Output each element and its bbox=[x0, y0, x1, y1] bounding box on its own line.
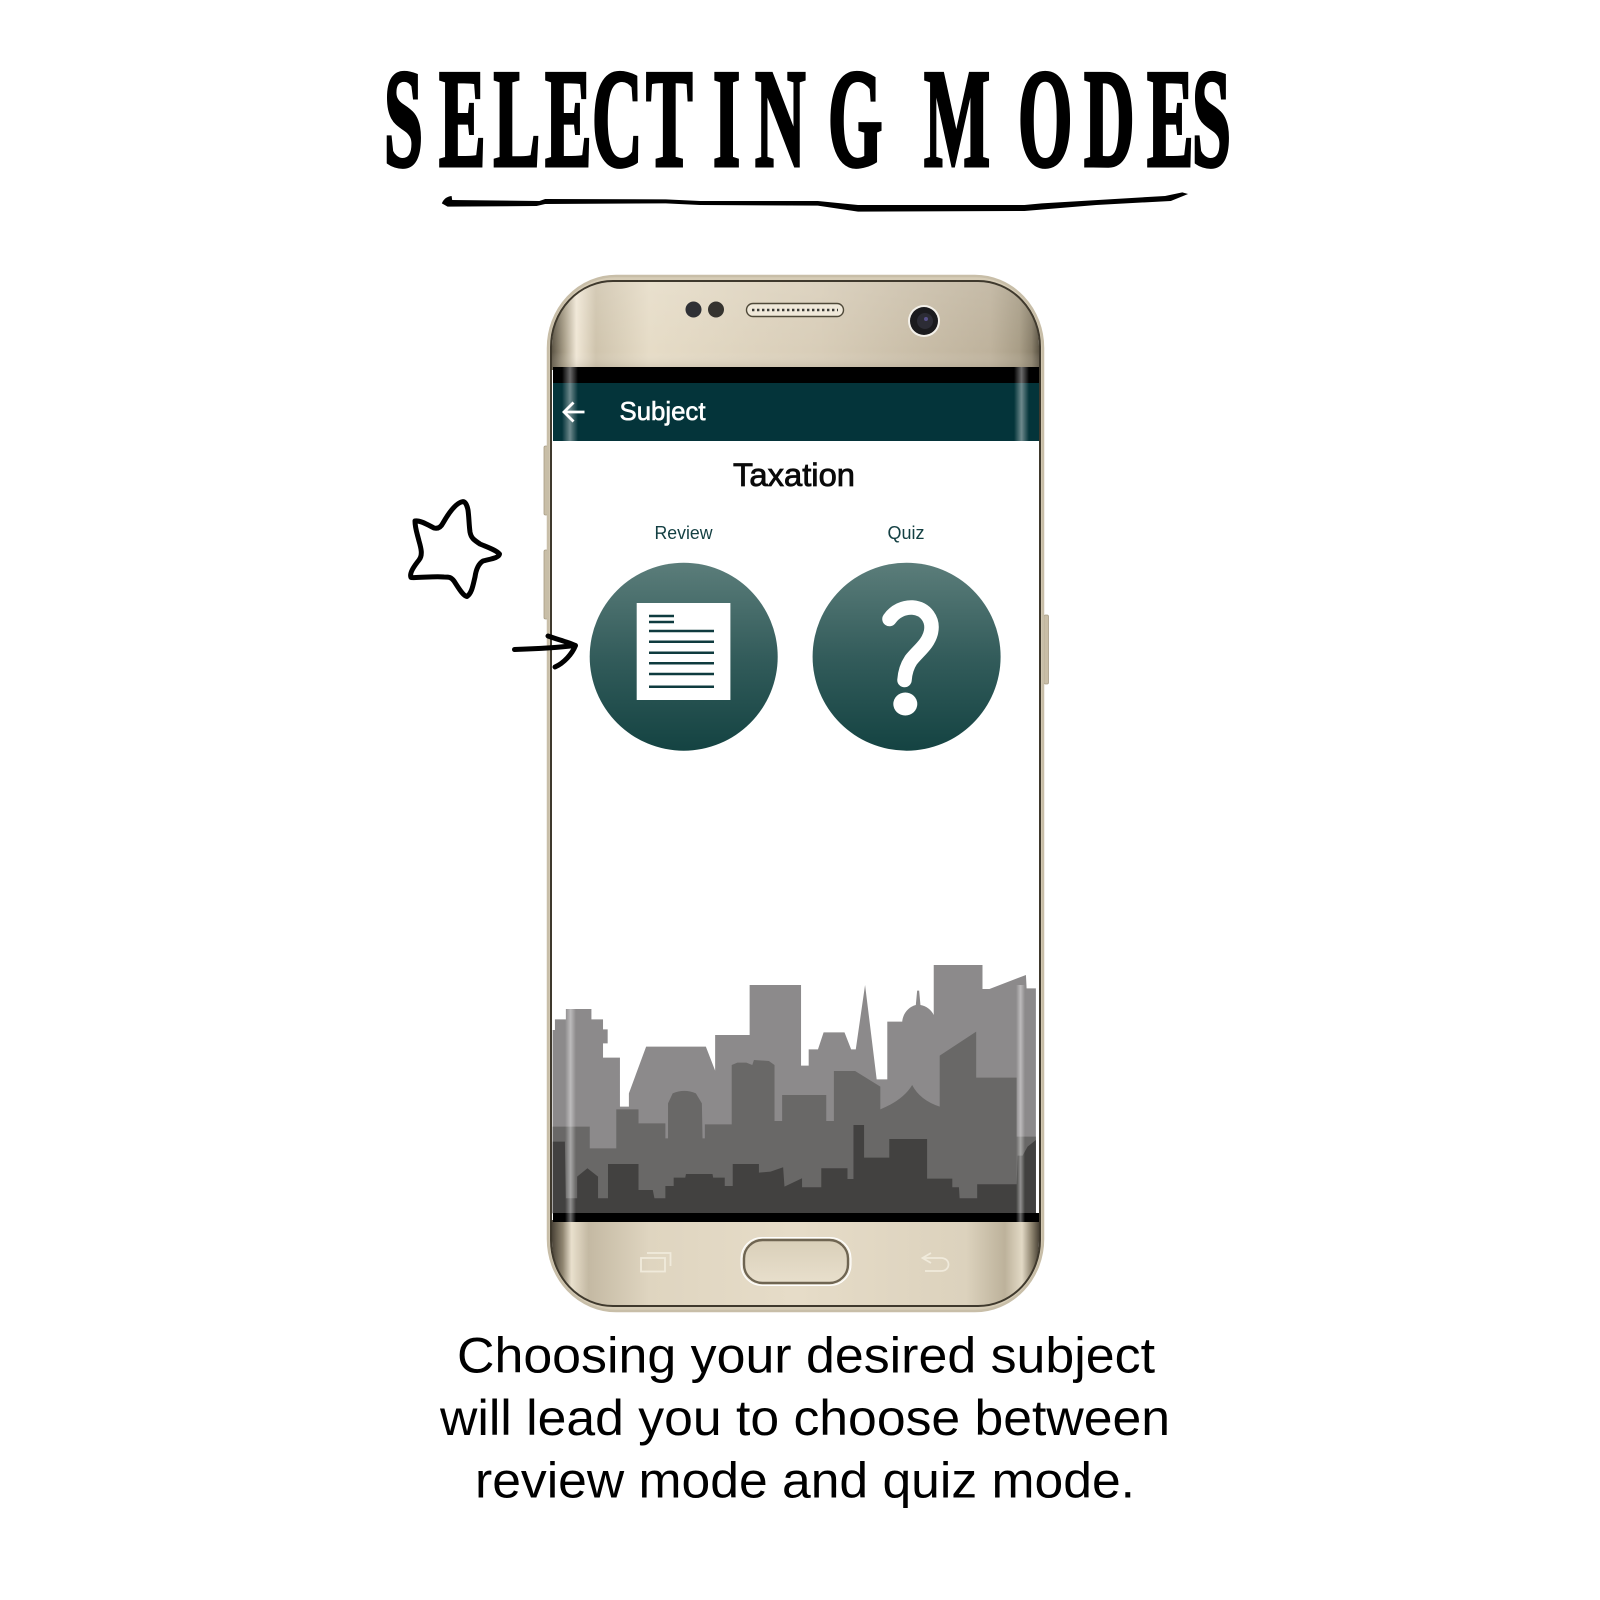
subject heading: Taxation bbox=[733, 457, 855, 493]
review label: Review bbox=[654, 522, 713, 543]
front camera bbox=[908, 305, 940, 337]
description text: will lead you to choose between bbox=[439, 1390, 1170, 1446]
side buttons bbox=[544, 446, 1048, 684]
hand-drawn star bbox=[411, 502, 500, 596]
description text: review mode and quiz mode. bbox=[475, 1452, 1135, 1508]
review button bbox=[590, 563, 778, 751]
icon: document bbox=[637, 603, 730, 700]
phone body bbox=[548, 276, 1043, 1311]
screen background bbox=[553, 441, 1039, 1213]
back arrow bbox=[564, 402, 584, 422]
icon: back key bbox=[922, 1253, 948, 1271]
home button bbox=[741, 1238, 851, 1286]
bottom black bar bbox=[553, 1213, 1039, 1222]
description text bbox=[439, 1328, 1170, 1508]
title: SELECTING MODES bbox=[384, 40, 1231, 196]
microphones bbox=[686, 302, 724, 318]
top black bar bbox=[553, 367, 1039, 383]
title underline stroke bbox=[442, 192, 1188, 212]
app bar title: Subject bbox=[620, 396, 706, 426]
icon: recent apps key bbox=[641, 1253, 670, 1272]
curved edge reflections bbox=[562, 367, 1029, 1222]
smartphone mockup bbox=[544, 276, 1048, 1311]
description text: Choosing your desired subject bbox=[457, 1328, 1155, 1384]
icon: question mark bbox=[890, 607, 931, 716]
app bar bbox=[553, 383, 1039, 441]
skyline middle layer bbox=[553, 1032, 1036, 1213]
infographic canvas bbox=[386, 70, 1229, 1508]
city skyline bbox=[553, 965, 1036, 1213]
speaker grille bbox=[746, 304, 844, 316]
screen bbox=[553, 367, 1039, 1222]
skyline front layer bbox=[553, 1125, 1036, 1213]
quiz button bbox=[813, 563, 1001, 751]
quiz label: Quiz bbox=[888, 522, 924, 543]
skyline back layer bbox=[553, 965, 1036, 1213]
hand-drawn arrow bbox=[514, 636, 576, 667]
